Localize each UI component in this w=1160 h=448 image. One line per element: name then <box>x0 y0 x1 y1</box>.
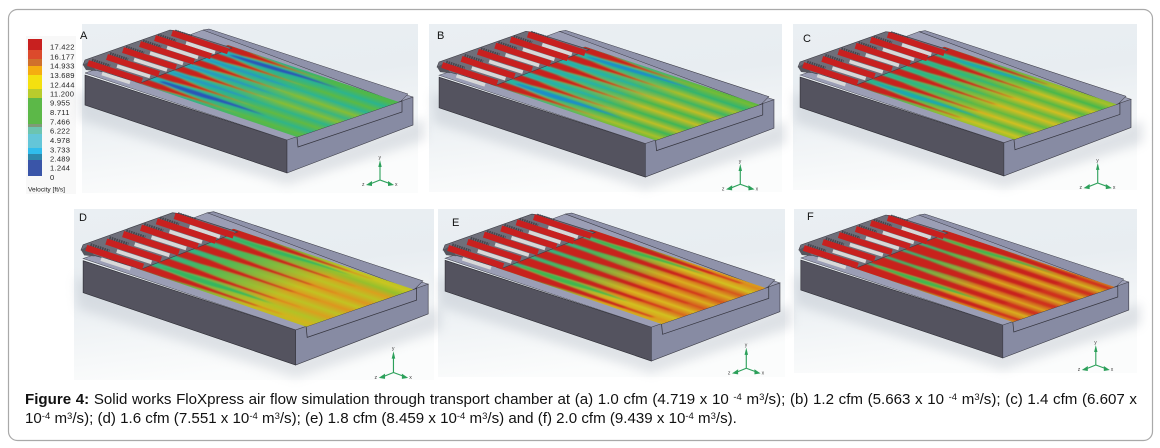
axis triad A: y <box>378 155 382 161</box>
colour legend: velocity <box>26 36 76 194</box>
axis triad D <box>375 346 412 381</box>
colour legend: velocity: 9.955 <box>50 98 70 108</box>
simulation E <box>438 213 792 376</box>
label D: D <box>79 212 87 224</box>
axis triad D: z <box>375 375 378 381</box>
block and flow F <box>794 214 1141 373</box>
colour legend: velocity: 13.689 <box>50 71 75 80</box>
caption: 10-4 m3/s); (d) 1.6 cfm (7.551 x 10-4 m3/s); (e) 1.8 cfm (8.459 x 10-4 m3/s) and (f) 2.0 cfm (9.439 x 10-4 m3/s). <box>25 410 737 427</box>
axis triad D: y <box>392 346 395 352</box>
simulation A <box>78 29 425 188</box>
axis triad C: x <box>1113 185 1116 191</box>
panel B background <box>429 24 782 192</box>
label A: A <box>80 30 88 42</box>
simulation D <box>76 212 441 381</box>
label E: E <box>452 217 459 229</box>
colour legend: velocity: 4.978 <box>50 136 70 145</box>
colour legend: velocity: 7.466 <box>50 118 70 126</box>
axis triad F <box>1078 340 1114 373</box>
axis triad C: z <box>1080 185 1083 191</box>
axis triad E: y <box>745 343 748 349</box>
colour legend: velocity: 16.177 <box>50 52 75 62</box>
colour legend: velocity: 17.422 <box>50 42 75 52</box>
axis triad F: z <box>1078 367 1081 373</box>
axis triad B <box>722 159 759 192</box>
colour legend: velocity: 1.244 <box>50 164 70 172</box>
colour legend: velocity: Velocity [ft/s] <box>28 186 65 194</box>
panel C background <box>793 24 1137 190</box>
colour legend: velocity: 11.200 <box>50 90 74 98</box>
simulation F <box>794 211 1141 373</box>
axis triad E: z <box>728 370 731 376</box>
caption <box>25 391 1137 427</box>
axis triad F: y <box>1094 340 1097 346</box>
block and flow A <box>78 29 425 185</box>
colour legend: velocity: 3.733 <box>50 146 70 154</box>
block and flow D <box>76 212 441 381</box>
axis triad B: x <box>756 186 759 192</box>
axis triad E: x <box>762 370 765 376</box>
colour legend: velocity: 6.222 <box>50 126 70 136</box>
panel E background <box>438 209 785 377</box>
colour legend: velocity: 0 <box>50 173 54 182</box>
colour legend: velocity: 14.933 <box>50 62 75 70</box>
block and flow E <box>438 213 792 376</box>
simulation C <box>793 31 1143 191</box>
axis triad B: y <box>739 159 742 165</box>
axis triad C: y <box>1096 158 1099 164</box>
axis triad F: x <box>1111 367 1114 373</box>
label C: C <box>803 33 811 45</box>
axis triad A: z <box>362 182 365 188</box>
panel F background <box>794 209 1137 373</box>
panel A background <box>82 24 418 193</box>
caption: Figure 4: Solid works FloXpress air flow simulation through transport chamber at (a) 1.0 cfm (4.719 x 10 -4 m3/s); (b) 1.2 cfm (5.663 x 10 -4 m3/s); (c) 1.4 cfm (6.607 x <box>25 391 1137 408</box>
label F: F <box>807 211 814 223</box>
simulation B <box>432 30 786 192</box>
colour legend: velocity: 12.444 <box>50 80 75 90</box>
panel D background <box>74 209 434 380</box>
axis triad C <box>1080 158 1116 191</box>
colour legend: velocity: 8.711 <box>50 108 70 117</box>
axis triad A <box>362 155 398 188</box>
axis triad D: x <box>409 375 412 381</box>
axis triad A: x <box>395 182 398 188</box>
axis triad E <box>728 343 765 376</box>
colour legend: velocity: 2.489 <box>50 154 70 164</box>
block and flow B <box>432 30 786 192</box>
block and flow C <box>793 31 1143 191</box>
axis triad B: z <box>722 186 725 192</box>
label B: B <box>437 30 444 42</box>
